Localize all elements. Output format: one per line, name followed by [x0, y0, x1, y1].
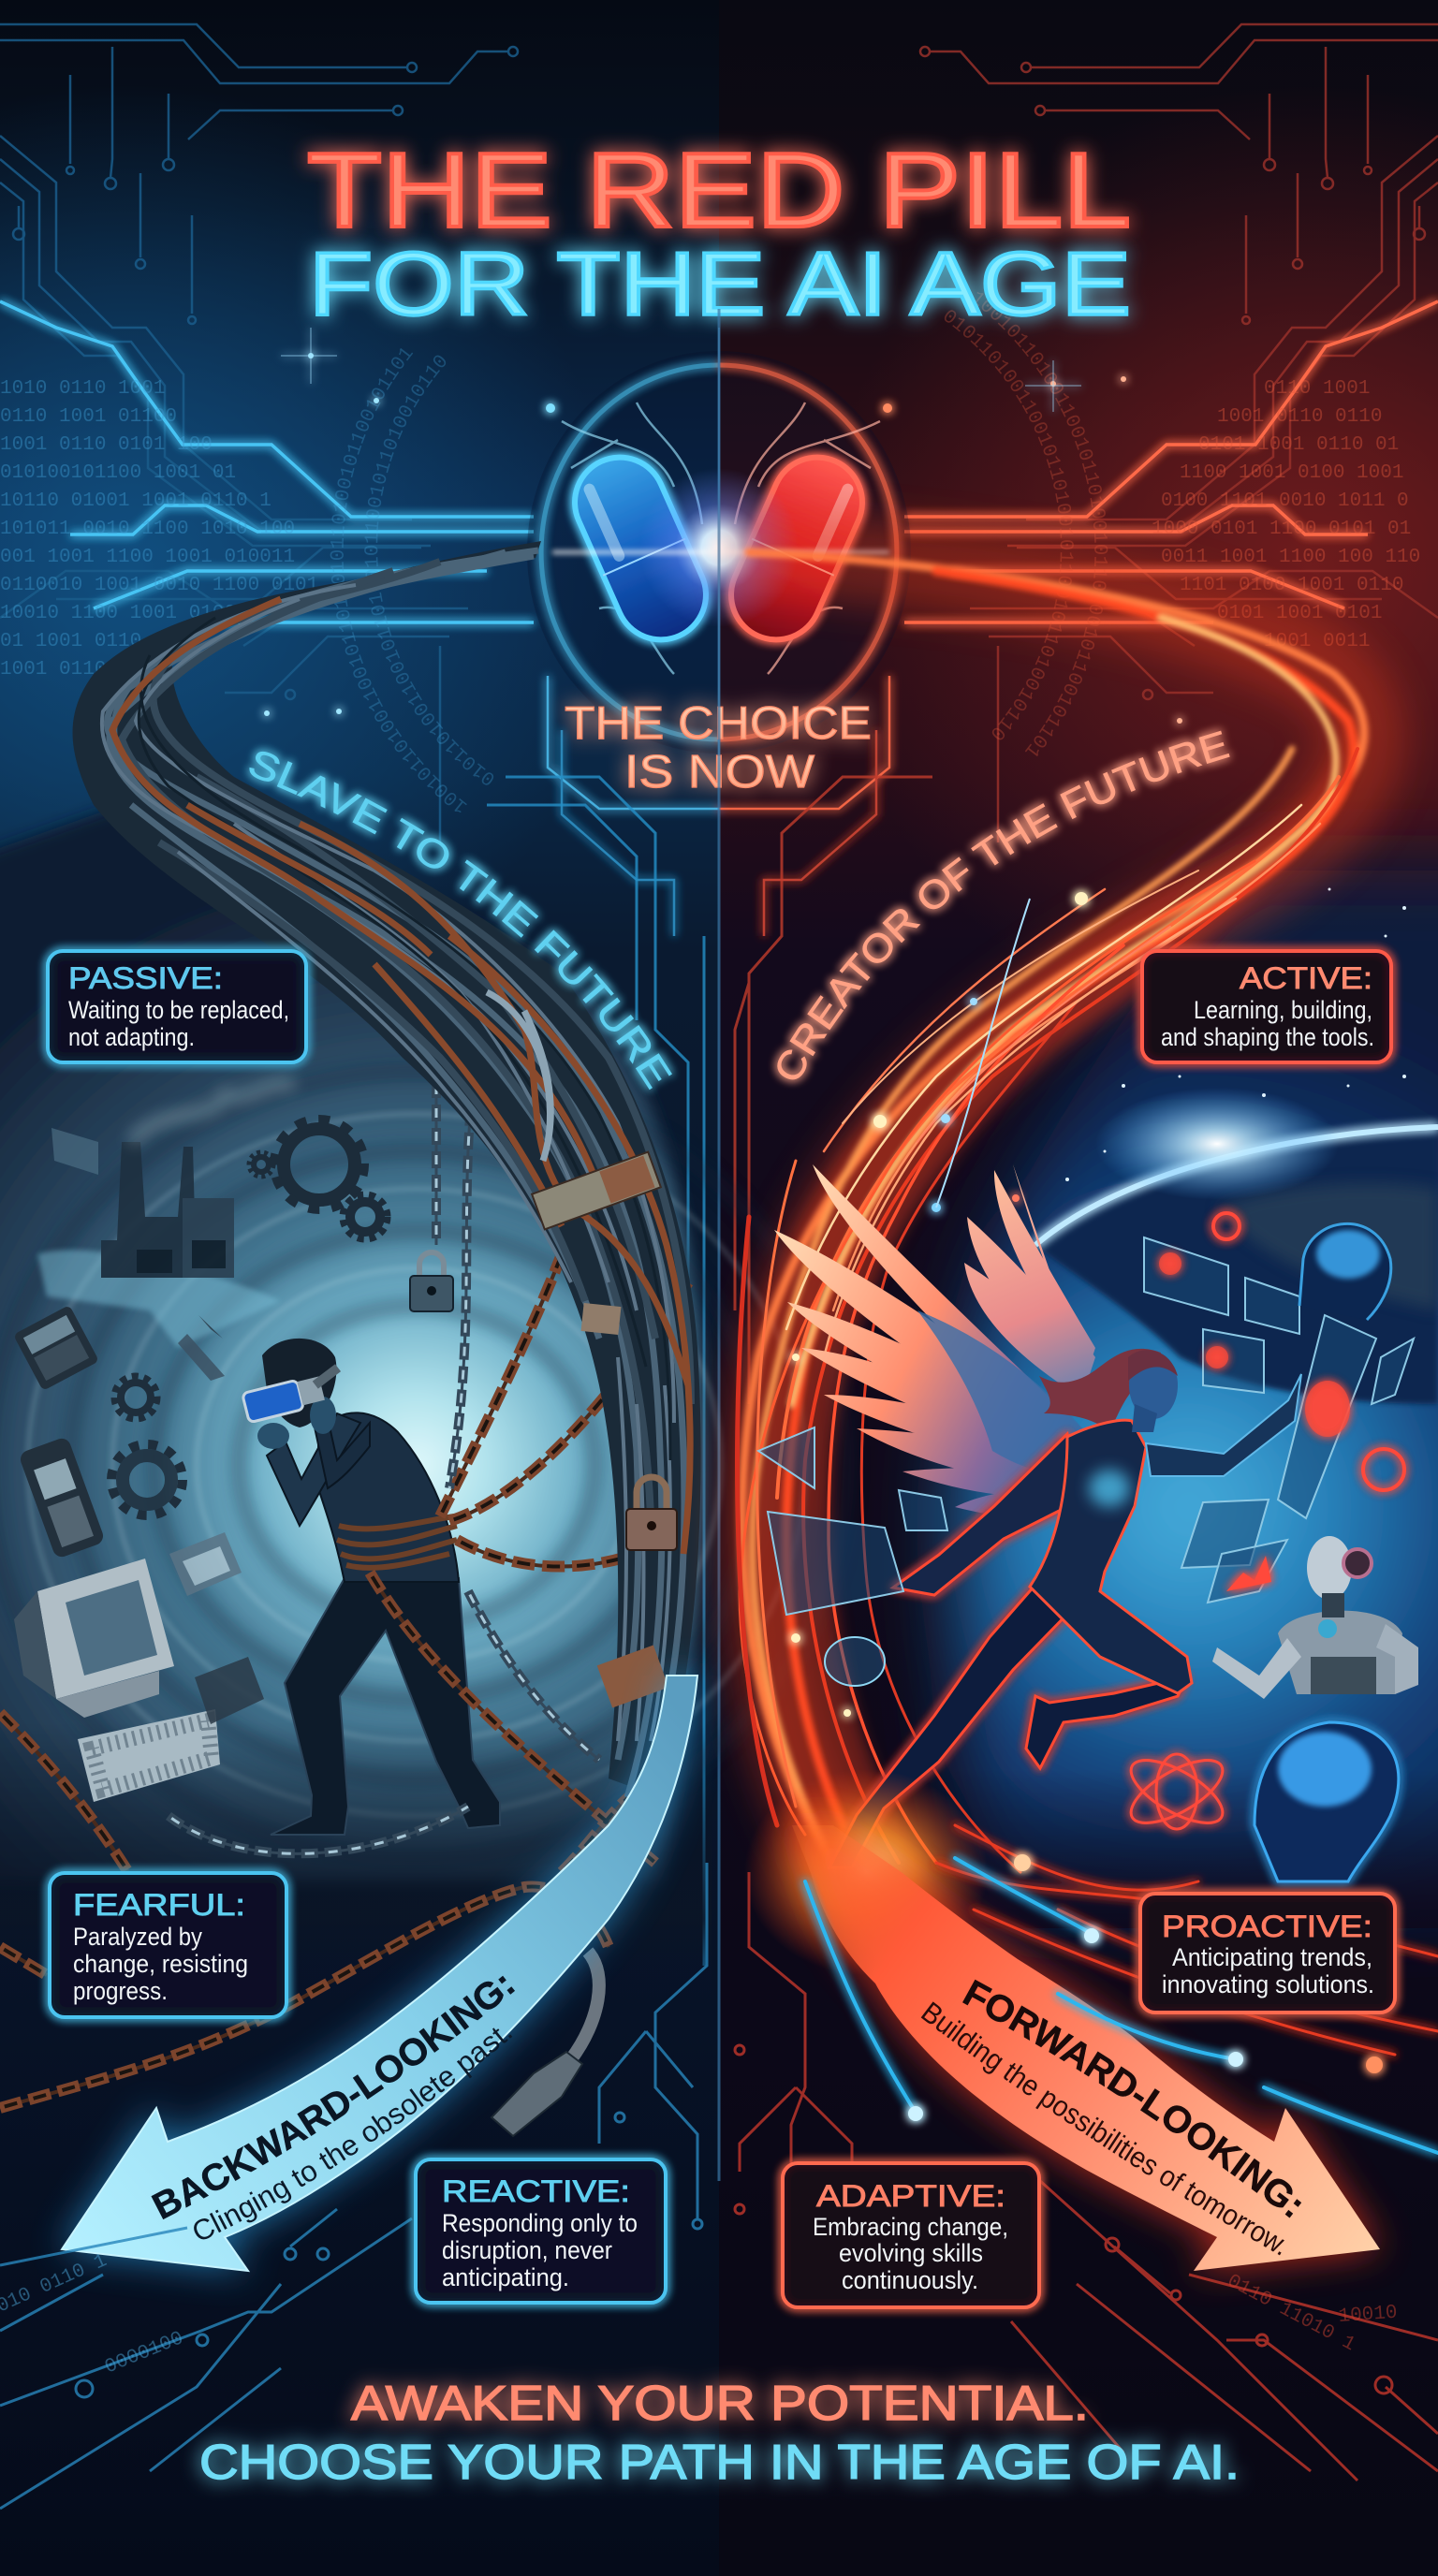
- title: [307, 131, 1131, 334]
- card: active: Learning, building,: [1194, 996, 1372, 1024]
- right panel circuit frame: [735, 777, 932, 1404]
- binary data streams left: 001 1001 1100 1001 010011: [0, 547, 295, 568]
- binary data streams right: 0101 1001 0101: [1217, 603, 1382, 624]
- card: active: ACTIVE:: [1240, 961, 1372, 995]
- card: passive: not adapting.: [68, 1023, 195, 1051]
- lower binary: [0, 2250, 1398, 2378]
- card: adaptive: continuously.: [842, 2266, 978, 2294]
- binary data streams right: 1000 0101 1100 0101 01: [1152, 519, 1411, 540]
- frayed cable plug: [492, 1952, 599, 2136]
- panel heading: slave to the future: SLAVE TO THE FUTURE: [243, 744, 678, 1095]
- footer line 2: CHOOSE YOUR PATH IN THE AGE OF AI.: [199, 2436, 1240, 2490]
- bright circuit traces right: [904, 301, 1438, 622]
- title line 1: THE RED PILL: [307, 131, 1131, 249]
- torso: [318, 1412, 459, 1582]
- card: proactive: innovating solutions.: [1162, 1970, 1374, 1998]
- hanging padlock: [410, 1252, 453, 1311]
- card: active: [1142, 951, 1391, 1062]
- left panel circuit frame: [487, 777, 704, 1966]
- arrow title: FORWARD-LOOKING:: [962, 1979, 1301, 2218]
- atom icon: [1122, 1748, 1232, 1836]
- grey chain links: [169, 1058, 599, 1853]
- factory: [37, 1084, 295, 1348]
- lower right circuit: [735, 1872, 1438, 2481]
- small brain icon: [825, 1637, 885, 1686]
- card: proactive: [1140, 1894, 1395, 2012]
- binary data streams left: 10110 01001 1001 0110 1: [0, 490, 271, 512]
- binary arcs left: 1001011010011001011010010110100101100101101: [330, 348, 467, 812]
- rusted cable bundle: [73, 541, 701, 1797]
- red pill: [717, 443, 876, 654]
- face: [1129, 1352, 1178, 1419]
- binary arcs right: 1001011010011001011010010110100101100101101: [976, 292, 1108, 756]
- center orb with pills: [527, 328, 911, 768]
- binary arcs right: 0101101001100101101001011001011010010110: [944, 310, 1074, 739]
- obsolete phones: [13, 1305, 106, 1559]
- lower binary: 0000100: [102, 2328, 186, 2378]
- headset: [242, 1368, 345, 1423]
- humanoid robot: [1212, 1536, 1418, 1699]
- binary data streams left: 1001 0110 0101 100: [0, 434, 213, 456]
- hair: [1039, 1349, 1161, 1432]
- backward-looking arrow: [47, 1655, 717, 2293]
- rear arm: [893, 1434, 1081, 1595]
- card: reactive: [416, 2159, 666, 2303]
- panel accents: [1159, 1213, 1404, 1591]
- circuit traces right: [920, 24, 1438, 842]
- binary data streams right: [1152, 378, 1420, 652]
- binary data streams right: 1001 0011: [1264, 631, 1370, 652]
- head: [262, 1339, 336, 1427]
- footer line 1: AWAKEN YOUR POTENTIAL.: [351, 2377, 1089, 2431]
- binary arcs left: 0101101001100101101001011001011010010110: [364, 356, 494, 785]
- card: active: and shaping the tools.: [1161, 1023, 1374, 1051]
- old keyboard: [78, 1709, 220, 1802]
- lower binary: 0110 11010 1: [1224, 2271, 1358, 2356]
- card: adaptive: evolving skills: [839, 2239, 983, 2267]
- chains: [0, 1058, 688, 2108]
- the choice is now box: [548, 676, 889, 936]
- circuit traces left: [0, 24, 518, 842]
- binary data streams left: 01 1001 0110: [0, 631, 141, 652]
- panel heading: creator of the future: CREATOR OF THE FUTURE: [770, 724, 1236, 1088]
- bound man with VR headset: [242, 1339, 500, 1835]
- card: adaptive: [783, 2163, 1039, 2307]
- binary data streams left: 1010 0110 1001: [0, 378, 165, 400]
- card: passive: Waiting to be replaced,: [68, 996, 289, 1024]
- binary data streams left: 101011 0010 1100 1010 100: [0, 519, 295, 540]
- old monitor: [14, 1559, 174, 1718]
- binary data streams right: 0110 1001: [1264, 378, 1370, 400]
- flying woman: [829, 1349, 1301, 1867]
- card: reactive: REACTIVE:: [442, 2174, 630, 2208]
- old laptop and papers: [169, 1315, 264, 1724]
- gears upper: [249, 1120, 388, 1239]
- binary data streams left: 1001 0110: [0, 659, 106, 681]
- fiery energy stream: [730, 552, 1364, 1872]
- stars: [1065, 887, 1406, 1181]
- sparkles: [264, 328, 1182, 724]
- title line 2: FOR THE AI AGE: [309, 234, 1131, 334]
- torso and thigh: [1030, 1420, 1192, 1693]
- card: reactive: anticipating.: [442, 2263, 569, 2291]
- holographic panels: [758, 1237, 1414, 1615]
- choice line 2: IS NOW: [624, 747, 815, 798]
- back leg: [829, 1585, 1077, 1867]
- binary data streams right: 0100 1101 0010 1011 0: [1161, 490, 1409, 512]
- card: reactive: disruption, never: [442, 2236, 612, 2264]
- center divider: [717, 309, 721, 2181]
- footer call to action: [199, 2377, 1240, 2490]
- rusty chain links: [0, 1254, 688, 2108]
- comet streaks right: [805, 1825, 1438, 2153]
- binary data streams right: 1101 0100 1001 0110: [1180, 575, 1403, 596]
- arrow subtitle: Clinging to the obsolete past.: [194, 2027, 513, 2239]
- card: passive: PASSIVE:: [68, 961, 223, 995]
- card: proactive: Anticipating trends,: [1172, 1943, 1372, 1971]
- right side space scene: [917, 871, 1438, 1928]
- lower left circuit: [0, 1863, 707, 2509]
- binary data streams left: 010100101100 1001 01: [0, 462, 236, 484]
- card: fearful: FEARFUL:: [73, 1888, 245, 1922]
- card: passive: [48, 951, 306, 1062]
- binary data streams right: 1100 1001 0100 1001: [1180, 462, 1403, 484]
- waist chain wrap: [337, 1516, 457, 1568]
- gears lower: [111, 1376, 183, 1515]
- lower binary: 10010: [1338, 2303, 1398, 2328]
- blue pill: [561, 443, 720, 654]
- card: adaptive: Embracing change,: [813, 2213, 1008, 2241]
- binary data streams right: 0011 1001 1100 100 110: [1161, 547, 1420, 568]
- card: adaptive: ADAPTIVE:: [816, 2179, 1005, 2213]
- binary data streams left: [0, 378, 318, 681]
- card: fearful: [50, 1873, 286, 2017]
- card: fearful: Paralyzed by: [73, 1923, 202, 1951]
- reaching arm: [1146, 1374, 1301, 1476]
- tunnel scene: [0, 805, 847, 2003]
- earth: [1035, 1127, 1438, 1404]
- arrow subtitle: Building the possibilities of tomorrow.: [921, 2001, 1284, 2256]
- angel wing back: [964, 1164, 1095, 1404]
- card: reactive: Responding only to: [442, 2209, 638, 2237]
- binary data streams left: 0110010 1001 0010 1100 0101: [0, 575, 318, 596]
- card: proactive: PROACTIVE:: [1162, 1910, 1372, 1943]
- card: fearful: change, resisting: [73, 1950, 248, 1978]
- forward-looking arrow: [777, 1810, 1397, 2295]
- binary data streams right: 0101 1001 0110 01: [1198, 434, 1399, 456]
- binary data streams right: 1001 0110 0110: [1217, 406, 1382, 428]
- choice line 1: THE CHOICE: [565, 698, 872, 749]
- card: fearful: progress.: [73, 1977, 168, 2005]
- angel wing front: [774, 1164, 1086, 1517]
- arrow title: BACKWARD-LOOKING:: [152, 1975, 515, 2220]
- arms: [267, 1413, 360, 1526]
- front leg: [1026, 1676, 1187, 1768]
- bright circuit traces left: [0, 301, 534, 622]
- binary data streams left: 0110 1001 01100: [0, 406, 177, 428]
- rusty padlock: [626, 1477, 677, 1550]
- cable bands: [532, 1152, 668, 1707]
- hands: [257, 1397, 336, 1449]
- flame burst at heel: [744, 1769, 988, 1975]
- legs: [271, 1578, 500, 1835]
- brain head upper: [1299, 1223, 1391, 1320]
- brain head lower: [1255, 1722, 1399, 1881]
- binary data streams left: 10010 1100 1001 0100 1: [0, 603, 259, 624]
